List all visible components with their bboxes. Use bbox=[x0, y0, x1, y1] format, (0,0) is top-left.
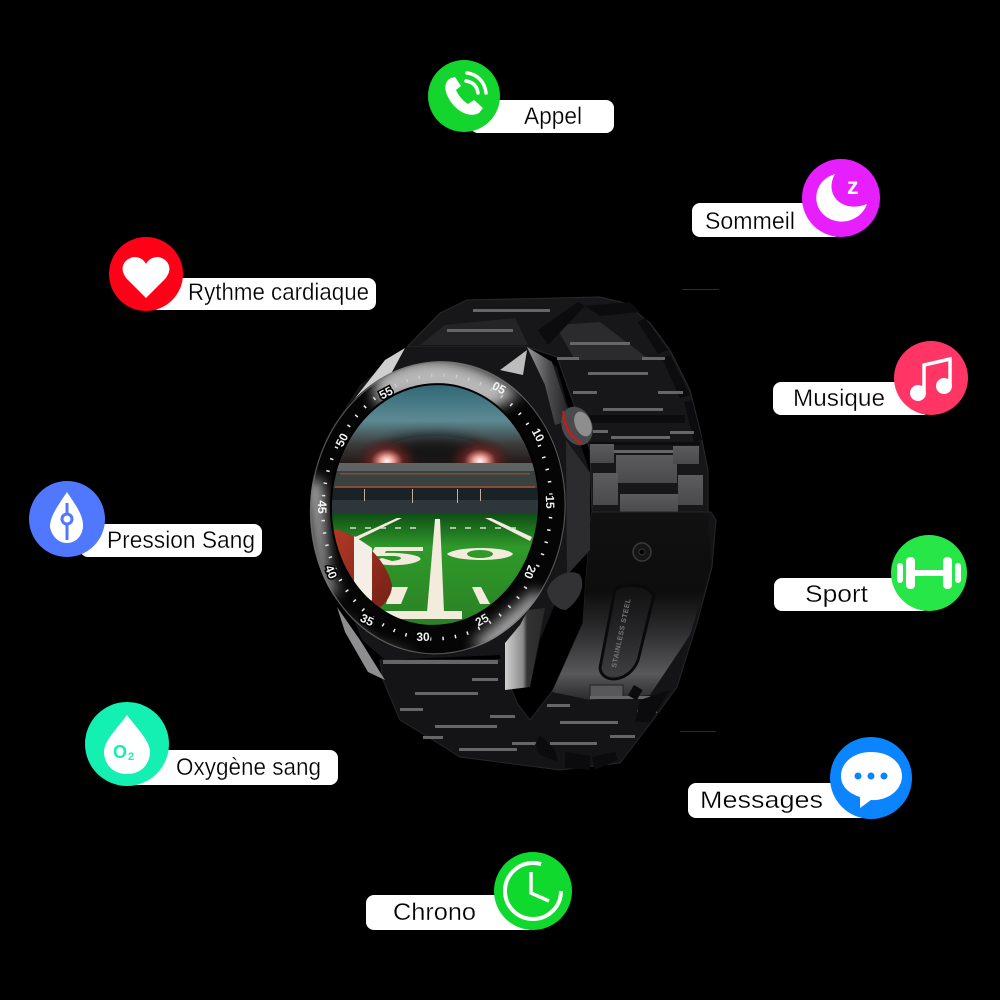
feature: Chrono bbox=[366, 852, 572, 930]
feature: Sport bbox=[774, 535, 967, 611]
lower band highlights bbox=[383, 660, 657, 751]
feature: Pression Sang bbox=[29, 481, 262, 557]
bezel numerals: 35 bbox=[358, 611, 376, 629]
clasp badge: STAINLESS STEEL bbox=[611, 598, 633, 668]
label: Chrono bbox=[393, 899, 476, 926]
icon: sleep z: z bbox=[847, 173, 858, 199]
gray end links bbox=[590, 444, 703, 512]
bezel numerals: 45 bbox=[315, 500, 329, 514]
label: Sommeil bbox=[705, 208, 795, 235]
stadium lights bbox=[360, 440, 508, 463]
bezel silver reflections bbox=[306, 359, 548, 655]
feature: Sommeil bbox=[692, 159, 880, 237]
bezel numerals bbox=[315, 379, 557, 644]
icon: phone bbox=[445, 73, 486, 115]
stray reflection lines bbox=[680, 289, 719, 732]
feature: Musique bbox=[773, 341, 968, 415]
label: Sport bbox=[805, 581, 868, 608]
clasp badge bbox=[600, 585, 654, 679]
label: Musique bbox=[793, 385, 885, 412]
bezel numerals: 50 bbox=[333, 431, 351, 449]
icon: chat bubble bbox=[841, 752, 902, 808]
stand rails bbox=[364, 489, 481, 503]
bezel numerals: 40 bbox=[322, 563, 340, 581]
field markings bbox=[353, 518, 532, 619]
icon: oxygen drop: O bbox=[113, 742, 127, 762]
bezel numerals: 55 bbox=[377, 384, 395, 402]
band highlights bbox=[447, 309, 694, 453]
outer link caps bbox=[535, 685, 670, 770]
lower pusher bbox=[547, 572, 582, 610]
label: Messages bbox=[700, 787, 823, 814]
feature: Oxygène sang bbox=[85, 702, 338, 786]
watch screen: stadium bbox=[325, 380, 545, 628]
icon: blood pressure drop bbox=[50, 492, 83, 543]
icon: heart bbox=[123, 257, 169, 298]
bezel numerals: 10 bbox=[529, 426, 547, 444]
bezel numerals: 20 bbox=[521, 563, 539, 581]
upper metal band bbox=[405, 297, 708, 512]
bezel numerals: 30 bbox=[416, 630, 430, 644]
feature: Appel bbox=[428, 60, 614, 133]
icon: clock bbox=[505, 863, 561, 919]
bezel bbox=[310, 361, 566, 655]
icon: moon bbox=[816, 174, 867, 222]
hash dashes bbox=[350, 527, 520, 529]
camera dot bbox=[633, 543, 651, 561]
label: Appel bbox=[524, 103, 582, 130]
icon: oxygen drop: 2 bbox=[128, 751, 134, 763]
bezel numerals: 15 bbox=[543, 495, 557, 509]
label: Pression Sang bbox=[107, 527, 255, 554]
bezel numerals: 05 bbox=[490, 379, 508, 397]
bezel ticks bbox=[312, 366, 562, 648]
icon: dumbbell bbox=[897, 557, 961, 589]
bezel numerals: 25 bbox=[473, 610, 492, 629]
clasp and lower band body bbox=[380, 512, 716, 770]
feature: Rythme cardiaque bbox=[109, 237, 376, 311]
icon: music note bbox=[910, 359, 952, 401]
smartwatch bbox=[298, 297, 716, 770]
watch case bbox=[325, 347, 590, 690]
label: Rythme cardiaque bbox=[188, 279, 369, 306]
crown with red ring bbox=[556, 402, 598, 450]
icon: oxygen drop bbox=[104, 715, 150, 774]
football bbox=[334, 528, 392, 608]
label: Oxygène sang bbox=[176, 754, 321, 781]
feature: Messages bbox=[688, 737, 912, 819]
